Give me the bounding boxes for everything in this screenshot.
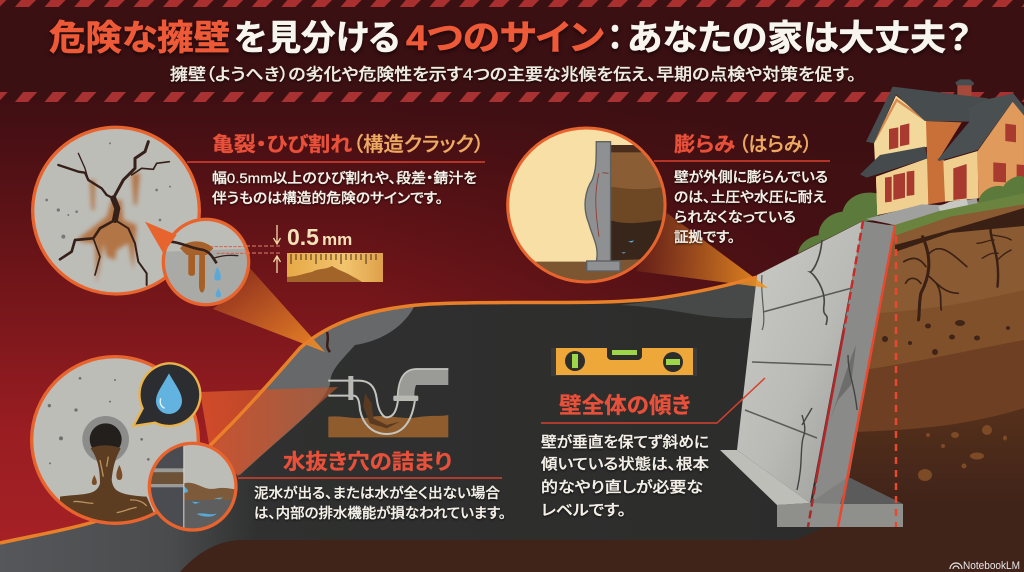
panel: crack text: 伴うものは構造的危険のサインです。: [212, 190, 443, 206]
soil pebbles: [882, 320, 1010, 355]
panel: drain text: [238, 451, 506, 521]
panel: tilt text: 壁全体の傾き: [559, 393, 691, 418]
walls: [874, 96, 928, 215]
title: [49, 19, 971, 58]
roofs: [866, 87, 988, 143]
panel: bulge text: 膨らみ: [674, 133, 735, 156]
icon: crack magnifier: [33, 127, 199, 294]
panel: crack text: [187, 133, 485, 206]
foundation and steps: [866, 198, 978, 225]
panel: crack text: （構造クラック）: [353, 133, 484, 156]
red guide lines: [844, 221, 863, 330]
panel: bulge text: られなくなっている: [674, 209, 796, 225]
icon: bulging wall magnifier: [507, 128, 667, 287]
title: ：: [607, 19, 623, 58]
panel: tilt text: [541, 378, 765, 519]
panel: drain text: 泥水が出る、または水が全く出ない場合: [254, 485, 500, 501]
measurement: 0.5mm: mm: [322, 230, 352, 249]
panel: crack text: 亀裂・ひび割れ: [212, 133, 352, 156]
title: 4つのサイン: [406, 19, 604, 58]
panel: bulge text: [654, 133, 830, 245]
spotlight: bulge: [636, 213, 768, 288]
panel: bulge text: 証拠です。: [674, 229, 735, 245]
windows and door: [885, 123, 1024, 202]
illustration: house on hill: [860, 79, 1024, 236]
grass: [895, 193, 1024, 236]
measurement: 0.5mm: 0.5: [287, 224, 319, 250]
title: あなたの家は大丈夫？: [627, 19, 971, 58]
panel: tilt text: 的なやり直しが必要な: [541, 478, 703, 496]
crack in ground slope: [327, 332, 330, 352]
ground and retaining slope: [0, 277, 860, 572]
panel: crack text: 幅0.5mm以上のひび割れや、段差・錆汁を: [212, 170, 477, 186]
measurement: 0.5mm: [246, 224, 383, 282]
icon: drain magnifier: [32, 357, 198, 527]
icon: clogged pipe: [328, 369, 448, 437]
wall seams and cracks: [745, 240, 857, 490]
ruler: [287, 253, 383, 282]
panel: tilt text: レベルです。: [541, 502, 626, 519]
illustration: tilted retaining wall: [720, 221, 903, 527]
panel: soil cross-section: [850, 190, 1024, 572]
title: を見分ける: [234, 19, 400, 58]
panel: tilt text: 壁が垂直を保てず斜めに: [541, 433, 709, 451]
panel: tilt text: 傾いている状態は、根本: [541, 455, 709, 473]
bottom earth band: [180, 527, 905, 572]
right bush: [978, 176, 1024, 204]
top hazard stripes: [0, 0, 1024, 7]
icon: drain detail magnifier: [149, 443, 241, 533]
subtitle: 擁壁（ようへき）の劣化や危険性を示す4つの主要な兆候を伝え、早期の点検や対策を促す。: [170, 65, 856, 84]
illustration: left bushes: [798, 193, 878, 253]
title: 危険な擁壁: [49, 19, 230, 58]
watermark: NotebookLM: NotebookLM: [963, 560, 1020, 572]
spotlight: crack: [213, 265, 325, 352]
orange ground outline: [0, 277, 757, 543]
spotlight: drain: [200, 387, 338, 476]
panel: bulge text: のは、土圧や水圧に耐え: [674, 189, 826, 205]
icon: crack detail magnifier: [145, 217, 253, 305]
panel: bulge text: 壁が外側に膨らんでいる: [674, 169, 828, 185]
panel: drain text: 水抜き穴の詰まり: [283, 451, 452, 474]
lower hazard stripes: [0, 92, 1024, 102]
icon: spirit level: [551, 348, 697, 376]
roots: [904, 227, 1011, 320]
panel: drain text: は、内部の排水機能が損なわれています。: [254, 505, 506, 521]
panel: bulge text: （はらみ）: [739, 133, 812, 156]
chimney: [955, 79, 974, 103]
icon: water drop speech bubble: [133, 363, 200, 426]
